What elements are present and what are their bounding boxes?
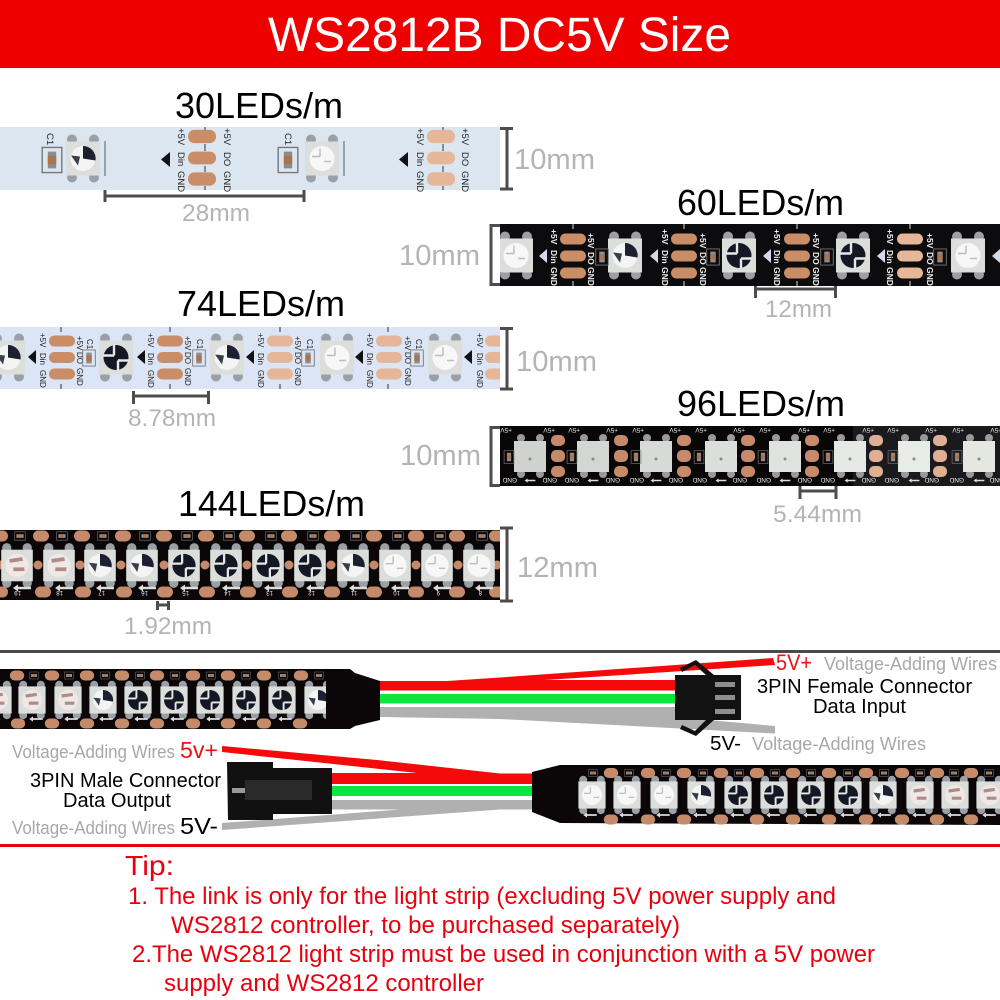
label: 5V-: 5V- [180, 813, 218, 839]
panel: 60 LEDs per metre strip [399, 182, 1000, 323]
panel: 144 LEDs per metre strip [0, 483, 598, 640]
heading: 30LEDs/m: 30LEDs/m [175, 85, 343, 126]
dimension: 10mm height: 10mm [399, 240, 480, 272]
white LED strip 30 per metre: GND [414, 171, 425, 192]
black LED strip 60 per metre: GND [925, 267, 935, 286]
black LED strip 96 per metre: GND [564, 476, 579, 483]
white LED strip 74 per metre: DO [403, 352, 412, 364]
black LED strip 60 per metre: GND [698, 267, 708, 286]
tip 1: 1. The link is only for the light strip (excluding 5V power supply and [128, 883, 836, 910]
black LED strip 96 per metre: GND [502, 476, 517, 483]
white LED strip 74 per metre: C1 [305, 339, 314, 350]
white LED strip 74 per metre [0, 327, 511, 389]
black LED strip 144 per metre: 14 [224, 589, 231, 595]
white LED strip 74 per metre: DO [183, 352, 192, 364]
black LED strip 96 per metre [500, 426, 1000, 486]
white LED strip 74 per metre: GND [475, 370, 484, 388]
dimension: 10mm height: 10mm [516, 346, 597, 378]
LED strip with end cap [0, 669, 380, 729]
wires: red, green, gray [380, 658, 775, 734]
white LED strip 30 per metre: +5V [414, 128, 425, 146]
black LED strip 60 per metre: GND [586, 267, 596, 286]
icon: 3-pin male connector [227, 762, 332, 820]
white LED strip 30 per metre: +5V [459, 128, 470, 146]
dimension: 10mm height: 10mm [400, 440, 481, 472]
white LED strip 74 per metre: GND [146, 370, 155, 388]
white LED strip 74 per metre: +5V [183, 336, 192, 351]
header banner [0, 0, 1000, 68]
dimension: 12mm pitch: 12mm [765, 296, 832, 323]
heading: 144LEDs/m: 144LEDs/m [178, 483, 365, 524]
black LED strip 96 per metre: +5V [500, 426, 512, 433]
white LED strip 74 per metre: GND [293, 368, 302, 386]
black LED strip 96 per metre: GND [884, 476, 899, 483]
white LED strip 74 per metre: Din [256, 353, 265, 365]
black LED strip 60 per metre: +5V [772, 229, 782, 245]
black LED strip 60 per metre: +5V [925, 233, 935, 249]
black LED strip 144 per metre: 10 [393, 589, 400, 595]
black LED strip 96 per metre: +5V [862, 426, 874, 433]
panel: 74 LEDs per metre strip [0, 283, 597, 432]
dimension: 28mm pitch: 28mm [182, 200, 250, 227]
black LED strip 144 per metre: 18 [56, 589, 63, 595]
label: female connector: 3PIN Female Connector [757, 676, 972, 698]
dimension: 12mm height: 12mm [517, 552, 598, 584]
black LED strip 144 per metre: 16 [141, 589, 148, 595]
black LED strip 60 per metre: DO [925, 252, 935, 265]
black LED strip 60 per metre: GND [811, 267, 821, 286]
white LED strip 74 per metre: DO [75, 352, 84, 364]
label: 5V-: 5V- [710, 733, 741, 755]
white LED strip 74 per metre: Din [365, 353, 374, 365]
black LED strip 144 per metre: 12 [308, 589, 315, 595]
LED strip with end cap [532, 765, 1000, 825]
black LED strip 60 per metre: +5V [811, 233, 821, 249]
heading: 60LEDs/m: 60LEDs/m [677, 182, 844, 223]
black LED strip 60 per metre: DO [586, 252, 596, 265]
white LED strip 74 per metre: Din [38, 353, 47, 365]
black LED strip 96 per metre: GND [605, 476, 620, 483]
black LED strip 60 per metre: GND [660, 267, 670, 286]
black LED strip 60 per metre: +5V [586, 233, 596, 249]
white LED strip 74 per metre: C1 [85, 339, 94, 350]
title: WS2812B DC5V Size [268, 9, 731, 62]
white LED strip 74 per metre: +5V [365, 333, 374, 348]
black LED strip 96 per metre: +5V [606, 426, 618, 433]
black LED strip 96 per metre: GND [924, 476, 939, 483]
label: voltage-adding wires bottom: Voltage-Adding Wires [12, 818, 175, 838]
black LED strip 96 per metre: +5V [568, 426, 580, 433]
black LED strip 144 per metre: 11 [350, 589, 357, 595]
black LED strip 60 per metre: +5V [660, 229, 670, 245]
black LED strip 60 per metre [499, 224, 1000, 286]
tip 2 [132, 941, 875, 997]
tip 2: 2.The WS2812 light strip must be used in conjunction with a 5V power [132, 941, 875, 968]
black LED strip 96 per metre: +5V [925, 426, 937, 433]
white LED strip 30 per metre: DO [221, 152, 232, 166]
black LED strip 60 per metre: +5V [549, 229, 559, 245]
black LED strip 60 per metre: Din [772, 250, 782, 264]
black LED strip 144 per metre: 9 [436, 589, 440, 595]
label: male connector: 3PIN Male Connector [30, 770, 221, 792]
black LED strip 60 per metre: GND [549, 267, 559, 286]
black LED strip 96 per metre: GND [542, 476, 557, 483]
white LED strip 74 per metre: GND [38, 370, 47, 388]
dimension: 5.44mm pitch: 5.44mm [773, 501, 862, 528]
white LED strip 30 per metre: Din [414, 152, 425, 166]
white LED strip 74 per metre: C1 [414, 339, 423, 350]
black LED strip 96 per metre: +5V [759, 426, 771, 433]
black LED strip 144 per metre [0, 530, 505, 600]
white LED strip 74 per metre: Din [146, 353, 155, 365]
white LED strip 74 per metre: GND [365, 370, 374, 388]
dimension: 1.92mm pitch: 1.92mm [124, 613, 212, 640]
black LED strip 60 per metre: +5V [885, 229, 895, 245]
white LED strip 74 per metre: +5V [146, 333, 155, 348]
label: male connector [30, 770, 221, 812]
tip 1 [128, 883, 836, 939]
dimension: 10mm height [399, 226, 500, 284]
white LED strip 30 per metre: +5V [221, 128, 232, 146]
dimension: 10mm height [500, 328, 597, 389]
black LED strip 60 per metre: DO [698, 252, 708, 265]
white LED strip 74 per metre: +5V [38, 333, 47, 348]
black LED strip 144 per metre: 8 [478, 589, 482, 595]
panel: 96 LEDs per metre strip [400, 383, 1000, 528]
label: voltage-adding wires: Voltage-Adding Wires [824, 654, 997, 674]
label: female connector [757, 676, 972, 718]
black LED strip 96 per metre: +5V [887, 426, 899, 433]
heading: 96LEDs/m: 96LEDs/m [677, 383, 845, 424]
black LED strip 96 per metre: GND [668, 476, 683, 483]
white LED strip 74 per metre: +5V [403, 336, 412, 351]
white LED strip 74 per metre: GND [183, 368, 192, 386]
white LED strip 30 per metre [0, 127, 500, 192]
black LED strip 96 per metre: GND [692, 476, 707, 483]
white LED strip 74 per metre: DO [293, 352, 302, 364]
black LED strip 96 per metre: GND [861, 476, 876, 483]
dimension: 12mm pitch [756, 286, 836, 323]
white LED strip 30 per metre: C1 [282, 133, 293, 145]
icon: 3-pin female connector [675, 660, 741, 736]
dimension: 28mm pitch [105, 190, 304, 227]
dimension: 1.92mm pitch [124, 601, 212, 640]
white LED strip 30 per metre: GND [175, 171, 186, 192]
black LED strip 60 per metre: +5V [698, 233, 708, 249]
label: 5V+: 5V+ [776, 650, 812, 675]
dimension: 10mm height [500, 128, 595, 189]
white LED strip 74 per metre: C1 [195, 339, 204, 350]
wires: red, green, gray [222, 746, 532, 830]
black LED strip 144 per metre: 17 [98, 589, 105, 595]
white LED strip 74 per metre: +5V [75, 336, 84, 351]
white LED strip 74 per metre: GND [403, 368, 412, 386]
white LED strip 74 per metre: GND [256, 370, 265, 388]
label: female connector: Data Input [813, 696, 906, 718]
black LED strip 96 per metre: GND [756, 476, 771, 483]
white LED strip 30 per metre: GND [459, 171, 470, 192]
white LED strip 30 per metre: Din [175, 152, 186, 166]
panel: data input wiring [0, 650, 997, 755]
black LED strip 96 per metre: GND [732, 476, 747, 483]
black LED strip 96 per metre: GND [629, 476, 644, 483]
black LED strip 96 per metre: +5V [798, 426, 810, 433]
dimension: 8.78mm pitch: 8.78mm [128, 405, 216, 432]
label: voltage-adding wires top: Voltage-Adding Wires [12, 742, 175, 762]
black LED strip 60 per metre: GND [772, 267, 782, 286]
black LED strip 144 per metre: 15 [182, 589, 189, 595]
white LED strip 30 per metre: C1 [44, 133, 55, 145]
black LED strip 96 per metre: GND [820, 476, 835, 483]
black LED strip 60 per metre: Din [885, 250, 895, 264]
heading: Tip: Tip: [125, 850, 174, 881]
black LED strip 96 per metre: GND [797, 476, 812, 483]
dimension: 12mm height [500, 528, 598, 601]
dimension: 10mm height: 10mm [514, 144, 595, 176]
black LED strip 60 per metre: DO [811, 252, 821, 265]
dimension: 5.44mm pitch [773, 486, 862, 528]
white LED strip 74 per metre: Din [475, 353, 484, 365]
black LED strip 60 per metre: Din [549, 250, 559, 264]
tip 2: supply and WS2812 controller [164, 970, 484, 997]
white LED strip 74 per metre: +5V [475, 333, 484, 348]
label: voltage-adding wires: Voltage-Adding Wires [752, 734, 926, 754]
black LED strip 96 per metre: +5V [823, 426, 835, 433]
black LED strip 96 per metre: GND [949, 476, 964, 483]
black LED strip 96 per metre: +5V [543, 426, 555, 433]
dimension: 10mm height [400, 428, 500, 486]
panel: 30 LEDs per metre strip [0, 85, 595, 227]
black LED strip 144 per metre: 19 [14, 589, 21, 595]
white LED strip 30 per metre: DO [459, 152, 470, 166]
black LED strip 96 per metre: +5V [733, 426, 745, 433]
panel: data output wiring [12, 737, 1000, 839]
black LED strip 144 per metre: 13 [266, 589, 273, 595]
white LED strip 74 per metre: +5V [256, 333, 265, 348]
label: 5v+: 5v+ [180, 737, 218, 763]
white LED strip 74 per metre: GND [75, 368, 84, 386]
tip 1: WS2812 controller, to be purchased separately) [171, 912, 680, 939]
black LED strip 60 per metre: Din [660, 250, 670, 264]
divider: gray rule [0, 650, 1000, 653]
black LED strip 96 per metre: +5V [669, 426, 681, 433]
white LED strip 30 per metre: GND [221, 171, 232, 192]
black LED strip 96 per metre: +5V [632, 426, 644, 433]
divider: red rule [0, 844, 1000, 847]
panel: tips [125, 850, 875, 997]
label: male connector: Data Output [63, 790, 171, 812]
white LED strip 30 per metre: +5V [175, 128, 186, 146]
heading: 74LEDs/m: 74LEDs/m [177, 283, 345, 324]
dimension: 8.78mm pitch [128, 391, 216, 432]
black LED strip 60 per metre: GND [885, 267, 895, 286]
white LED strip 74 per metre: +5V [293, 336, 302, 351]
black LED strip 96 per metre: +5V [952, 426, 964, 433]
black LED strip 96 per metre: +5V [695, 426, 707, 433]
